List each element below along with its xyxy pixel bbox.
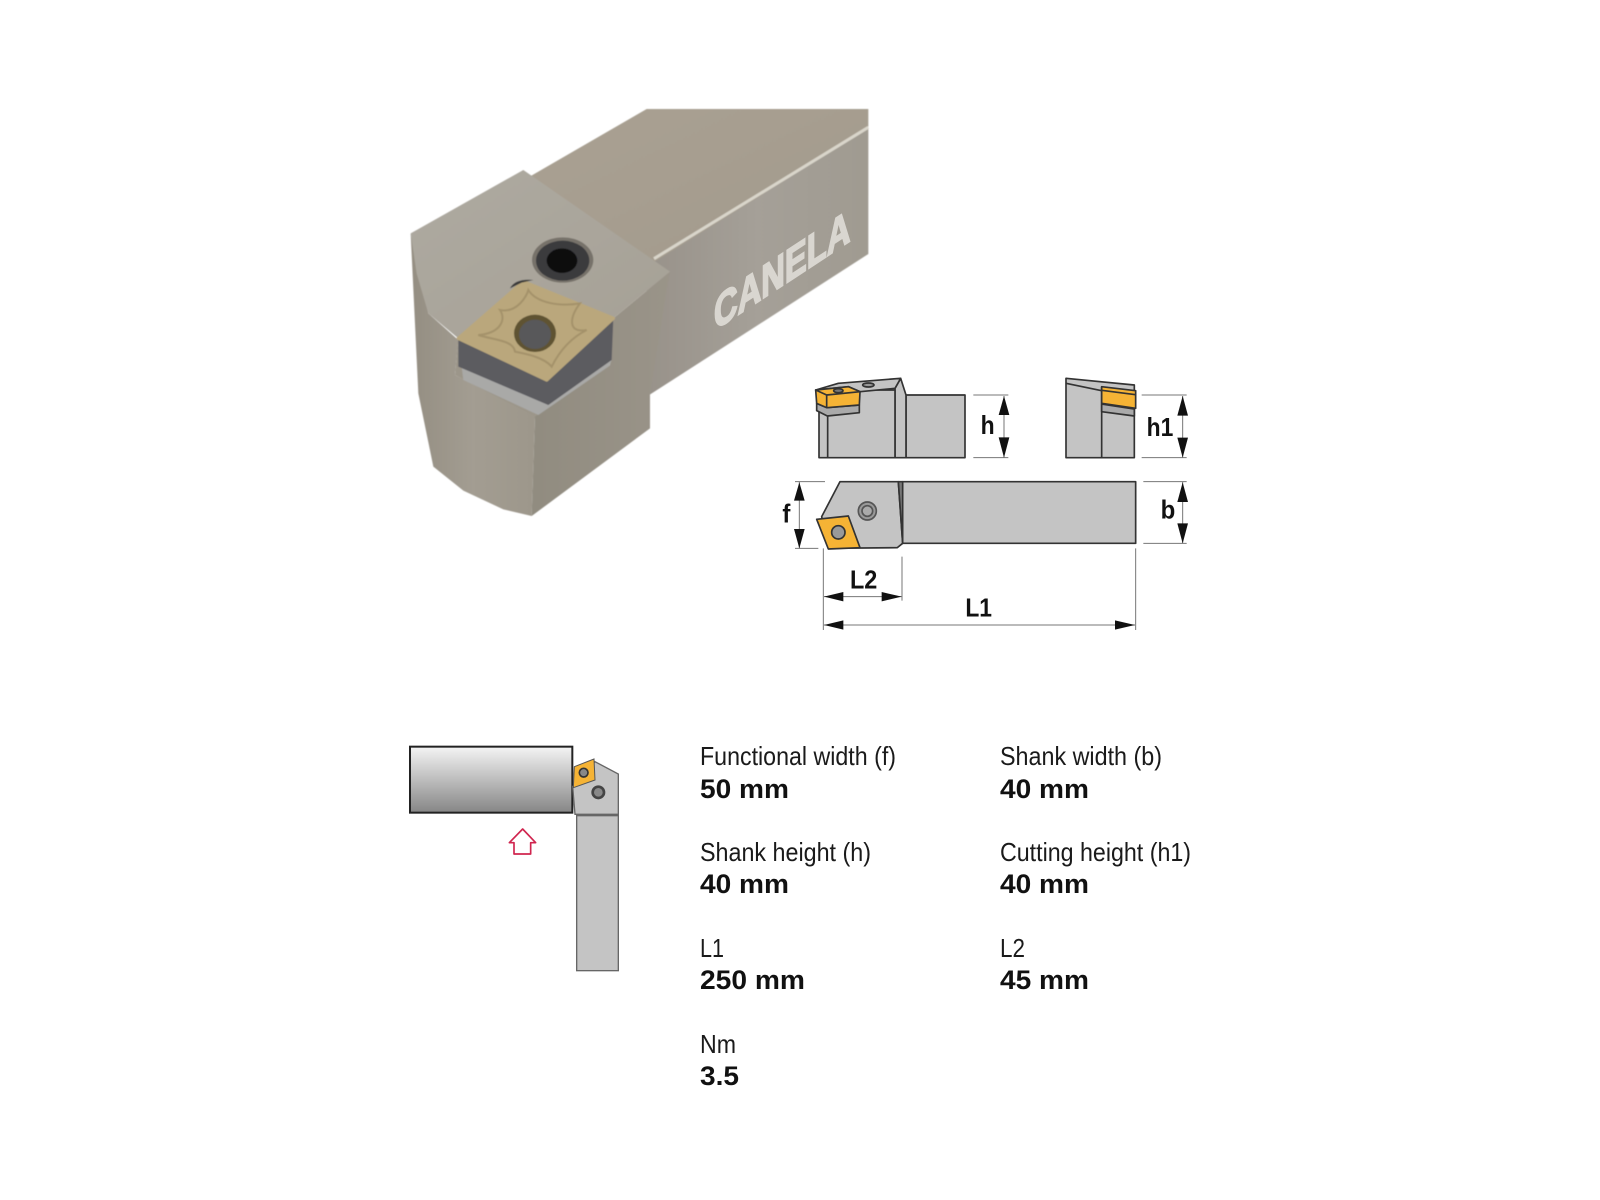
dimension arrowheads [794, 396, 1188, 630]
insert [573, 759, 595, 788]
pocket backing [455, 318, 613, 418]
photo: turning tool holder [411, 109, 868, 516]
insert hole [579, 768, 588, 777]
spec list [700, 741, 1191, 1091]
spec: shank width [1000, 741, 1162, 804]
dimension label b: b [1161, 494, 1175, 524]
spec: shank height: 40 mm [700, 869, 789, 899]
spec: functional width: 50 mm [700, 774, 789, 804]
spec: Nm: Nm [700, 1029, 736, 1059]
spec: L2: 45 mm [1000, 965, 1089, 995]
head left face [411, 233, 535, 516]
clamp screw [532, 237, 593, 283]
application diagram: tool and workpiece [410, 747, 618, 971]
clamp notch [510, 280, 533, 288]
insert side [458, 318, 613, 405]
spec: shank width: 40 mm [1000, 774, 1089, 804]
spec: cutting height: Cutting height (h1) [1000, 837, 1191, 867]
spec: shank height: Shank height (h) [700, 837, 871, 867]
dimension label L2: L2 [850, 564, 877, 594]
dimension lines [795, 395, 1187, 630]
insert hole [514, 315, 556, 352]
bar edge highlight [654, 127, 868, 259]
head top face [411, 170, 670, 338]
end view [1066, 378, 1136, 458]
spec: shank width: Shank width (b) [1000, 741, 1162, 771]
feed direction arrow [509, 829, 536, 854]
dimension label L1: L1 [965, 593, 992, 623]
bar side face [647, 128, 868, 397]
tool head [573, 762, 618, 814]
dimension label h1: h1 [1147, 412, 1173, 442]
spec: L1: 250 mm [700, 965, 805, 995]
spec: Nm [700, 1029, 739, 1091]
head right face [532, 272, 670, 516]
insert top face [458, 282, 613, 380]
spec: shank height [700, 837, 871, 899]
shim [462, 360, 612, 415]
spec: Nm: 3.5 [700, 1061, 739, 1091]
spec: L2: L2 [1000, 933, 1025, 963]
front view [816, 378, 965, 458]
top view [817, 482, 1136, 549]
dimension label f: f [782, 498, 791, 528]
insert chip-breaker pattern [478, 290, 587, 367]
spec: functional width: Functional width (f) [700, 741, 896, 771]
spec: functional width [700, 741, 896, 804]
technical drawing: dimensions [782, 378, 1188, 630]
spec: L1 [700, 933, 805, 995]
spec: cutting height: 40 mm [1000, 869, 1089, 899]
spec: L2 [1000, 933, 1089, 995]
dimension label h: h [981, 410, 995, 440]
workpiece [410, 747, 572, 813]
clamp screw [593, 787, 604, 798]
tool shank [577, 816, 618, 971]
spec: cutting height [1000, 837, 1191, 899]
spec: L1: L1 [700, 933, 724, 963]
bar top face [527, 109, 868, 273]
brand lettering: CANELA [714, 199, 850, 341]
